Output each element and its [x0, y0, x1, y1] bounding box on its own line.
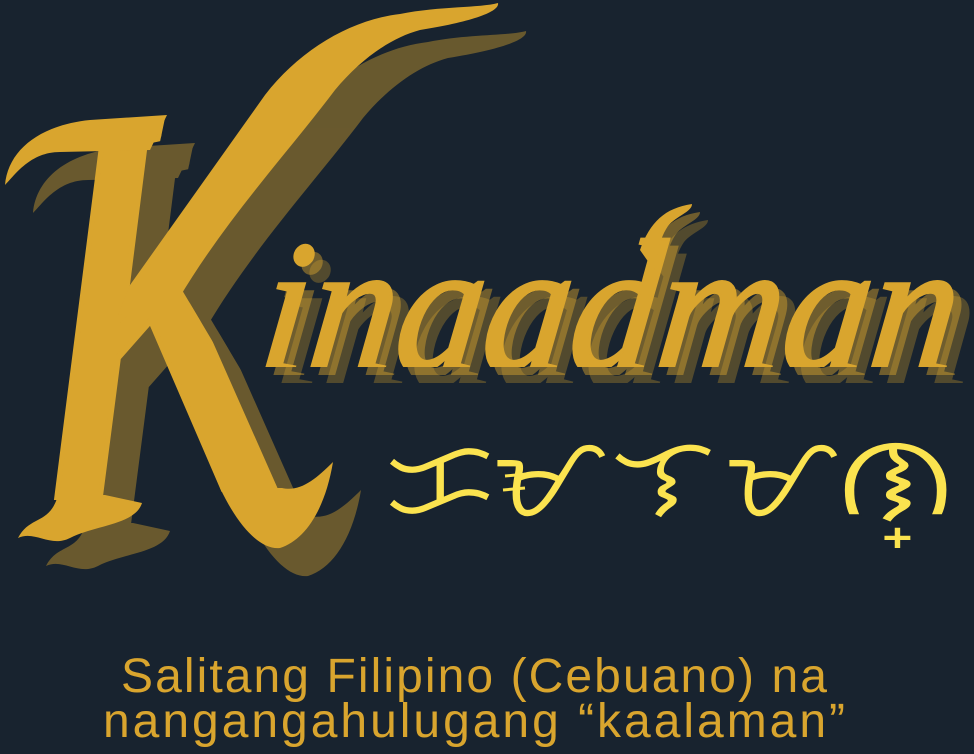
caption: Salitang Filipino (Cebuano) na — [121, 650, 827, 703]
Baybayin script line — [383, 411, 958, 549]
Baybayin script line: ᜋ — [490, 414, 608, 542]
caption — [103, 650, 845, 748]
caption: nangangahulugang “kaalaman” — [103, 695, 845, 748]
Baybayin script line: ᜋ — [722, 414, 840, 542]
Baybayin script line: ᜈ᜔ — [833, 411, 958, 549]
Baybayin script line: ᜃ — [383, 414, 496, 542]
big letter K with shadow — [5, 3, 526, 576]
big letter K with shadow: K — [40, 0, 378, 702]
Baybayin script line: ᜎ — [611, 414, 716, 542]
